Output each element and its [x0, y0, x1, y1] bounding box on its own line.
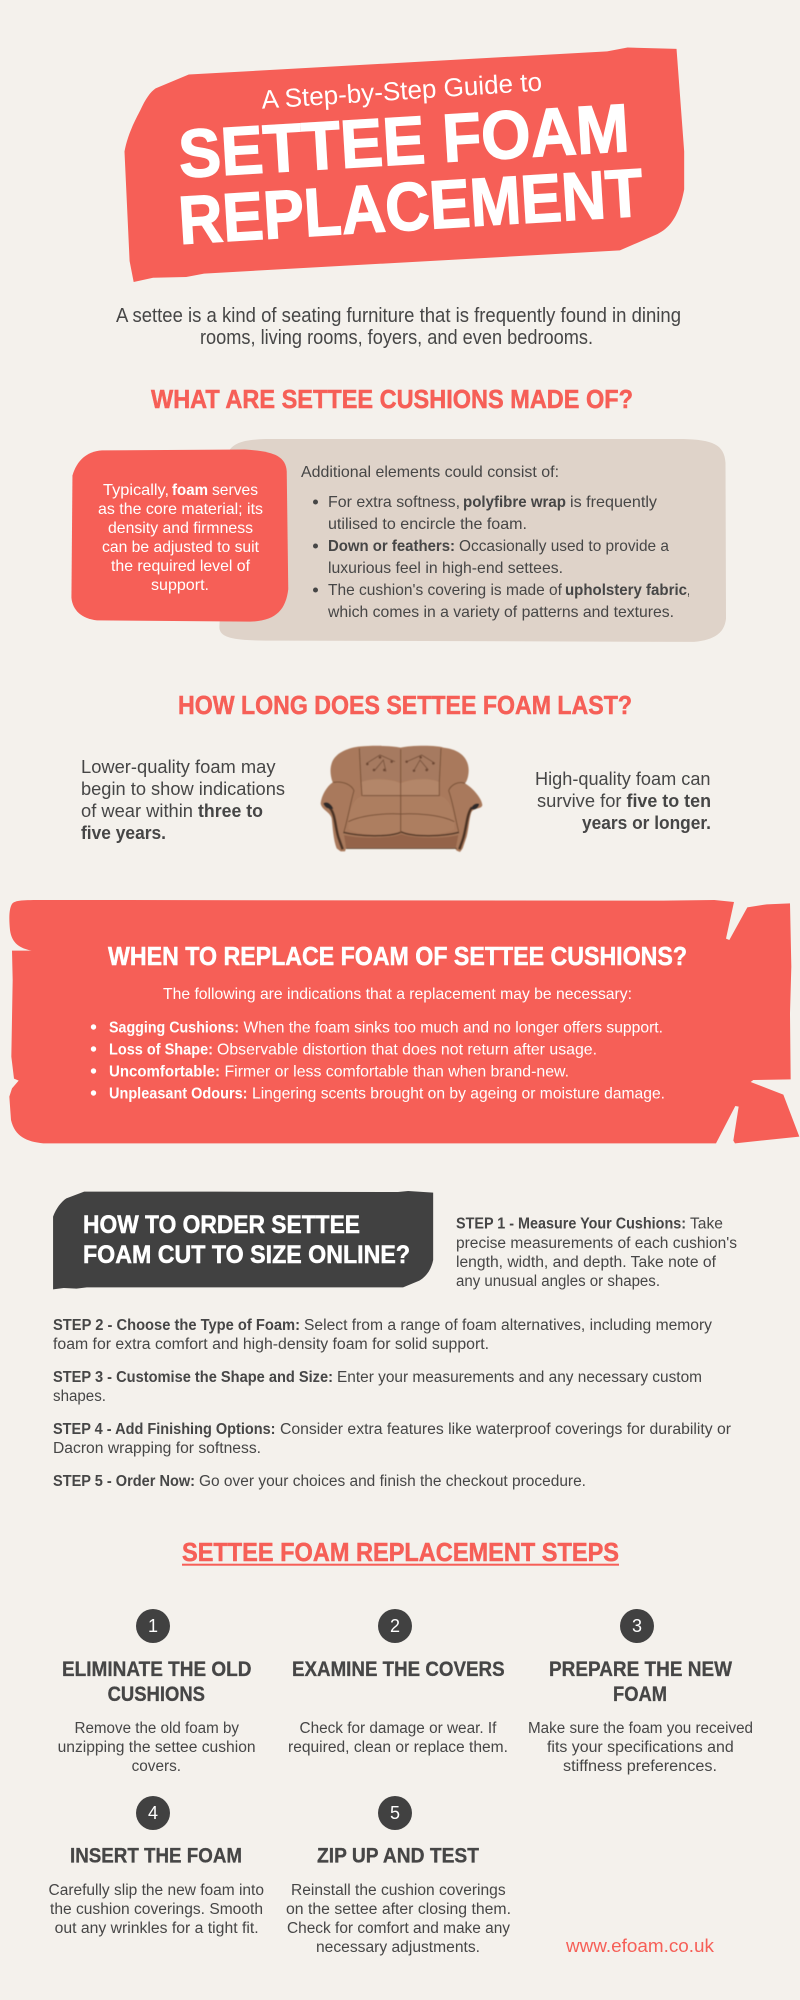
title line 2: REPLACEMENT: [176, 155, 645, 259]
replacement signs list: Unpleasant Odours:: [109, 1086, 248, 1103]
card text 1: Remove the old foam by: [74, 1720, 239, 1737]
number badge 2: 2: [390, 1616, 400, 1636]
number badge 3: [620, 1609, 654, 1643]
card text 3: stiffness preferences.: [563, 1758, 717, 1775]
card text 1: unzipping the settee cushion: [58, 1739, 256, 1756]
additional elements text: ,: [687, 582, 690, 599]
website url: www.efoam.co.uk: [565, 1936, 715, 1956]
card title 4: INSERT THE FOAM: [70, 1845, 242, 1868]
card title 1: ELIMINATE THE OLD: [62, 1658, 252, 1681]
callout text: support.: [151, 577, 209, 594]
card text 2: required, clean or replace them.: [288, 1739, 508, 1756]
intro text: [116, 305, 681, 349]
left lifespan text: [81, 756, 285, 843]
callout text: density and firmness: [108, 520, 253, 537]
additional elements text: is frequently: [570, 494, 657, 511]
panel: how to order heading: [53, 1191, 433, 1289]
card text 4: [48, 1882, 264, 1937]
right lifespan text: survive for: [537, 790, 622, 811]
card title 2: EXAMINE THE COVERS: [292, 1658, 505, 1681]
step 2 text: [53, 1317, 712, 1353]
callout text: can be adjusted to suit: [102, 539, 260, 556]
step 2 text: Select from a range of foam alternatives, including memory: [304, 1317, 712, 1334]
panel: cushion materials: [71, 439, 726, 642]
left lifespan text: five years.: [81, 822, 166, 843]
callout text: the required level of: [111, 558, 251, 575]
panel: how to order heading: FOAM CUT TO SIZE ONLINE?: [83, 1241, 410, 1269]
card text 2: Check for damage or wear. If: [300, 1720, 497, 1737]
step card 3: [528, 1609, 753, 1775]
callout text: as the core material; its: [98, 501, 263, 518]
step 5 text: STEP 5 - Order Now:: [53, 1473, 195, 1490]
step 4 text: Consider extra features like waterproof coverings for durability or: [280, 1421, 731, 1438]
additional elements text: upholstery fabric: [565, 582, 687, 599]
replacement signs list: [91, 1020, 665, 1103]
additional elements text: The cushion's covering is made of: [328, 582, 563, 599]
card text 3: [528, 1720, 753, 1775]
card title 3: PREPARE THE NEW: [549, 1658, 732, 1681]
beige panel: [219, 439, 726, 642]
intro text: rooms, living rooms, foyers, and even bedrooms.: [200, 327, 593, 349]
card text 5: on the settee after closing them.: [286, 1901, 511, 1918]
step 1 text: STEP 1 - Measure Your Cushions:: [456, 1216, 686, 1233]
left lifespan text: of wear within: [81, 800, 193, 821]
card text 4: the cushion coverings. Smooth: [50, 1901, 263, 1918]
icon: settee: [321, 746, 482, 852]
right lifespan text: [535, 768, 711, 833]
step card 2: [288, 1609, 508, 1756]
additional elements text: which comes in a variety of patterns and textures.: [327, 604, 674, 621]
right lifespan text: five to ten: [626, 790, 711, 811]
torn red banner: [9, 900, 799, 1143]
step 1 text: length, width, and depth. Take note of: [456, 1254, 717, 1271]
step card 5: [286, 1796, 511, 1956]
replacement signs list: Firmer or less comfortable than when brand-new.: [224, 1064, 569, 1081]
card title 1: CUSHIONS: [108, 1683, 205, 1706]
intro text: A settee is a kind of seating furniture that is frequently found in dining: [116, 305, 681, 327]
step 4 text: Dacron wrapping for softness.: [53, 1440, 261, 1457]
left lifespan text: begin to show indications: [81, 778, 285, 799]
right lifespan text: High-quality foam can: [535, 768, 710, 789]
left lifespan text: three to: [198, 800, 263, 821]
card text 4: Carefully slip the new foam into: [48, 1882, 264, 1899]
callout text: [98, 482, 263, 594]
callout text: serves: [212, 482, 258, 499]
replacement signs list: Observable distortion that does not return after usage.: [217, 1042, 597, 1059]
step 3 text: Enter your measurements and any necessary custom: [337, 1369, 702, 1386]
card text 5: Check for comfort and make any: [287, 1920, 510, 1937]
title banner: [124, 48, 684, 282]
card text 5: Reinstall the cushion coverings: [291, 1882, 506, 1899]
step card 1: [58, 1609, 256, 1775]
step 3 text: shapes.: [53, 1388, 106, 1405]
card text 1: [58, 1720, 256, 1775]
card title 3: [549, 1658, 732, 1706]
additional elements text: Additional elements could consist of:: [301, 464, 559, 481]
right lifespan text: years or longer.: [582, 812, 711, 833]
additional elements text: Occasionally used to provide a: [459, 538, 669, 555]
callout text: Typically,: [103, 482, 169, 499]
step 2 text: foam for extra comfort and high-density foam for solid support.: [53, 1336, 489, 1353]
additional elements text: Down or feathers:: [328, 538, 455, 555]
title blob: [124, 48, 684, 282]
step 5 text: Go over your choices and finish the checkout procedure.: [199, 1473, 586, 1490]
heading: how long does settee foam last: HOW LONG DOES SETTEE FOAM LAST?: [178, 690, 632, 720]
additional elements text: utilised to encircle the foam.: [328, 516, 527, 533]
heading: settee foam replacement steps: SETTEE FOAM REPLACEMENT STEPS: [182, 1537, 619, 1567]
additional elements text: polyfibre wrap: [463, 494, 566, 511]
step 1 text: any unusual angles or shapes.: [456, 1273, 660, 1290]
number badge 5: [378, 1796, 412, 1830]
number badge 5: 5: [390, 1803, 400, 1823]
number badge 1: [136, 1609, 170, 1643]
step 1 text: Take: [690, 1216, 723, 1233]
card text 1: covers.: [132, 1758, 181, 1775]
left lifespan text: Lower-quality foam may: [81, 756, 276, 777]
card text 3: Make sure the foam you received: [528, 1720, 753, 1737]
additional elements text: For extra softness,: [328, 494, 460, 511]
replacement signs list: Sagging Cushions:: [109, 1020, 239, 1037]
card text 3: fits your specifications and: [547, 1739, 734, 1756]
replacement signs list: Loss of Shape:: [109, 1042, 213, 1059]
card text 2: [288, 1720, 508, 1756]
step 1 text: precise measurements of each cushion's: [456, 1235, 737, 1252]
additional elements text: [301, 464, 690, 621]
step 2 text: STEP 2 - Choose the Type of Foam:: [53, 1317, 300, 1334]
title line 1: SETTEE FOAM: [176, 90, 631, 193]
card text 5: [286, 1882, 511, 1956]
card title 1: [62, 1658, 252, 1706]
card title 5: ZIP UP AND TEST: [317, 1845, 479, 1868]
red callout blob: [71, 450, 288, 622]
step 1 text: [456, 1216, 737, 1290]
number badge 4: [136, 1796, 170, 1830]
step card 4: [48, 1796, 264, 1937]
dark blob heading: HOW TO ORDER SETTEE: [83, 1211, 360, 1239]
panel: when to replace foam: [9, 900, 799, 1143]
card text 4: out any wrinkles for a tight fit.: [55, 1920, 259, 1937]
step 4 text: [53, 1421, 731, 1457]
heading: what are settee cushions made of: WHAT ARE SETTEE CUSHIONS MADE OF?: [151, 384, 633, 414]
step 3 text: STEP 3 - Customise the Shape and Size:: [53, 1369, 333, 1386]
additional elements text: luxurious feel in high-end settees.: [328, 560, 563, 577]
replacement signs list: Uncomfortable:: [109, 1064, 220, 1081]
number badge 4: 4: [148, 1803, 158, 1823]
dark blob: [53, 1191, 433, 1289]
callout text: foam: [172, 482, 208, 499]
card text 5: necessary adjustments.: [316, 1939, 480, 1956]
step 4 text: STEP 4 - Add Finishing Options:: [53, 1421, 276, 1438]
number badge 2: [378, 1609, 412, 1643]
replacement signs list: When the foam sinks too much and no longer offers support.: [244, 1020, 663, 1037]
title kicker: A Step-by-Step Guide to: [260, 67, 543, 115]
banner heading: WHEN TO REPLACE FOAM OF SETTEE CUSHIONS?: [108, 941, 687, 971]
banner intro: The following are indications that a replacement may be necessary:: [163, 986, 632, 1003]
number badge 3: 3: [632, 1616, 642, 1636]
step 3 text: [53, 1369, 702, 1405]
card title 3: FOAM: [613, 1683, 667, 1706]
replacement signs list: Lingering scents brought on by ageing or moisture damage.: [252, 1086, 665, 1103]
number badge 1: 1: [148, 1616, 158, 1636]
